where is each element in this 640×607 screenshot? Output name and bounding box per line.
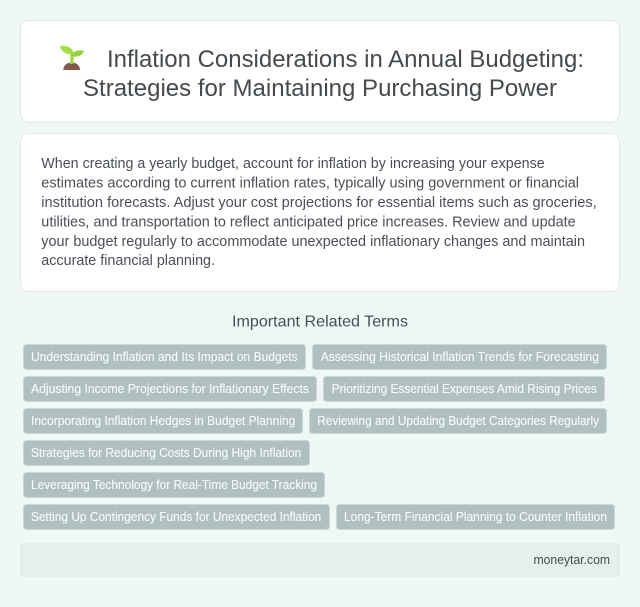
panel: title xyxy=(20,20,620,122)
chip: leveraging technology: Leveraging Technology for Real-Time Budget Tracking xyxy=(31,478,317,492)
chip: inflation hedges xyxy=(24,408,302,434)
chip: income projections xyxy=(24,376,316,402)
chip: reducing costs: Strategies for Reducing Costs During High Inflation xyxy=(31,446,301,460)
panel: related term chips xyxy=(24,344,614,530)
chip: long-term planning xyxy=(336,504,614,530)
description text: utilities, and transportation to reflect anticipated price increases. Review and update xyxy=(41,214,576,230)
description text: your budget regularly to accommodate unexpected inflationary changes and maintain xyxy=(41,234,585,250)
chip: contingency funds: Setting Up Contingency Funds for Unexpected Inflation xyxy=(31,510,321,524)
description text: When creating a yearly budget, account for inflation by increasing your expense xyxy=(41,156,545,172)
description text: estimates according to current inflation rates, typically using government or financial xyxy=(41,175,579,191)
chip: reviewing categories xyxy=(310,408,606,434)
chip: leveraging technology xyxy=(24,472,324,498)
description card xyxy=(20,134,620,292)
chip: inflation hedges: Incorporating Inflation Hedges in Budget Planning xyxy=(31,414,295,428)
chip: historical trends xyxy=(312,344,606,370)
chip: reducing costs xyxy=(24,440,310,466)
title line 2: Strategies for Maintaining Purchasing Power xyxy=(83,75,557,102)
chip: historical trends: Assessing Historical Inflation Trends for Forecasting xyxy=(321,350,599,364)
footer source text: moneytar.com xyxy=(534,553,610,567)
chip: income projections: Adjusting Income Projections for Inflationary Effects xyxy=(31,382,309,396)
chip: essential expenses: Prioritizing Essential Expenses Amid Rising Prices xyxy=(332,382,597,396)
chip: contingency funds xyxy=(24,504,330,530)
chip: understanding inflation xyxy=(24,344,306,370)
chip: reviewing categories: Reviewing and Updating Budget Categories Regularly xyxy=(317,414,600,428)
chip: understanding inflation: Understanding Inflation and Its Impact on Budgets xyxy=(31,350,298,364)
chip: long-term planning: Long-Term Financial Planning to Counter Inflation xyxy=(344,510,607,524)
title line 1: Inflation Considerations in Annual Budgeting: xyxy=(107,46,584,73)
chip: essential expenses xyxy=(324,376,604,402)
heading: related terms: Important Related Terms xyxy=(232,314,408,331)
description text xyxy=(41,156,597,269)
description text: institution forecasts. Adjust your cost projections for essential items such as groceries, xyxy=(41,195,597,211)
description text: accurate financial planning. xyxy=(41,253,215,269)
panel: description xyxy=(20,134,620,292)
footer bar xyxy=(20,543,620,577)
title card xyxy=(20,20,620,122)
icon: seedling xyxy=(60,46,84,70)
footer xyxy=(20,543,620,577)
